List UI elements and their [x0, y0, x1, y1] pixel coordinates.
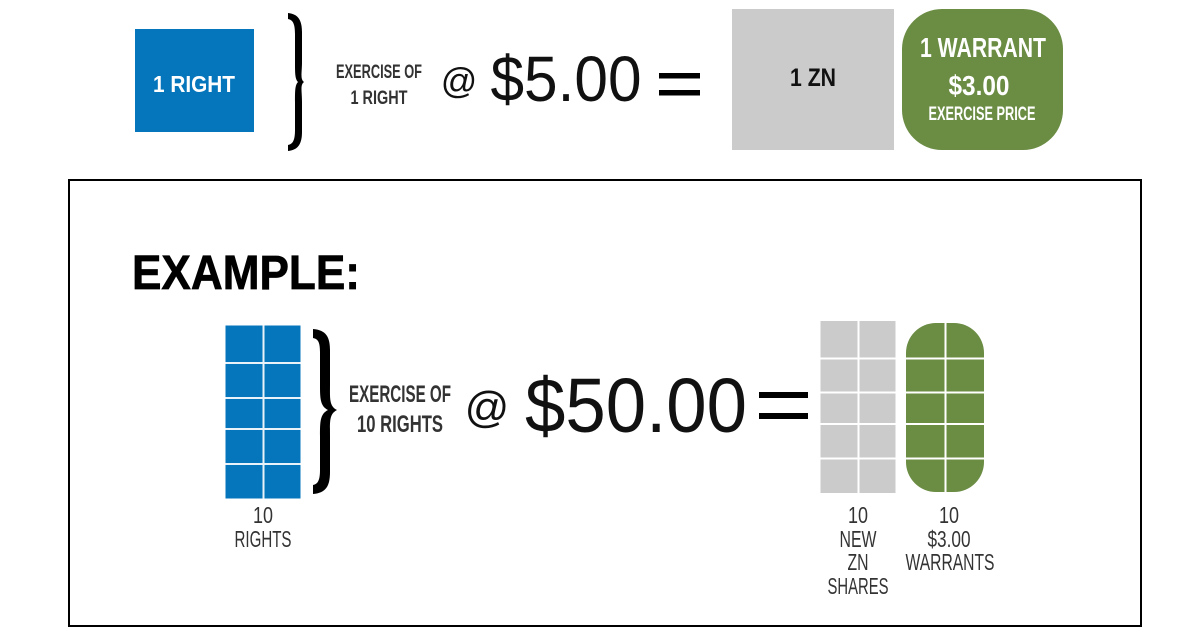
label: 10 $3.00 warrants: 10	[939, 502, 959, 528]
label: 10 rights	[234, 502, 292, 552]
icon: top curly brace	[288, 13, 304, 151]
grid: 10 new ZN shares	[820, 321, 896, 493]
equals sign	[759, 392, 808, 419]
label: 10 new ZN shares: ZN	[848, 549, 868, 575]
label: 10 $3.00 warrants: $3.00	[928, 526, 970, 552]
label: exercise of 10 rights: EXERCISE OF	[349, 381, 451, 408]
label: exercise of 10 rights	[349, 381, 451, 438]
label: 10 $3.00 warrants: WARRANTS	[906, 549, 994, 575]
price: at $50.00: $50.00	[525, 363, 747, 449]
box: 1 ZN share: 1 ZN	[790, 64, 836, 92]
box: 1 warrant: 1 WARRANT	[920, 32, 1046, 63]
box: 1 warrant	[902, 9, 1063, 150]
label: 10 new ZN shares	[828, 502, 888, 599]
label: exercise of 10 rights: 10 RIGHTS	[357, 411, 443, 438]
box: 1 ZN share	[732, 9, 894, 150]
top row: one right equation	[135, 9, 1063, 151]
label: exercise of 1 right	[336, 62, 422, 109]
panel: example	[69, 180, 1141, 626]
label: 10 new ZN shares: NEW	[840, 526, 877, 552]
label: 10 $3.00 warrants	[906, 502, 994, 575]
box: 1 right	[135, 29, 254, 132]
price: at $5.00: @	[441, 60, 477, 101]
box: 1 right: 1 RIGHT	[153, 71, 235, 97]
label: 10 new ZN shares: 10	[848, 502, 868, 528]
equals sign	[659, 73, 700, 96]
price: at $50.00: @	[465, 383, 509, 432]
grid: 10 rights	[226, 326, 300, 498]
label: 10 rights: 10	[253, 502, 273, 528]
heading: example: EXAMPLE:	[132, 247, 360, 300]
label: 10 new ZN shares: SHARES	[828, 573, 888, 599]
label: exercise of 1 right: 1 RIGHT	[350, 88, 408, 109]
grid: 10 warrants	[906, 323, 984, 492]
box: 1 warrant: EXERCISE PRICE	[928, 104, 1036, 125]
icon: example curly brace	[313, 329, 337, 494]
box: 1 warrant: $3.00	[948, 70, 1010, 101]
price: at $5.00: $5.00	[490, 43, 642, 115]
label: exercise of 1 right: EXERCISE OF	[336, 62, 422, 83]
label: 10 rights: RIGHTS	[234, 526, 292, 552]
